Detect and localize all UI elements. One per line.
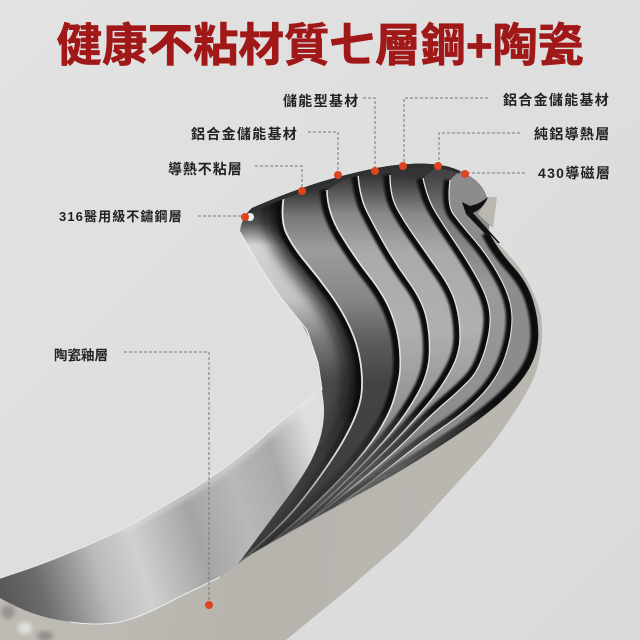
shadow before outer shell xyxy=(253,232,538,553)
shadow before layer 5 xyxy=(265,175,460,552)
callout: 316 stainless steel layer xyxy=(59,209,254,224)
layer band 6 xyxy=(308,168,506,522)
soft shading before first rim xyxy=(258,193,357,526)
callout: 316 stainless steel layer: 316醫用級不鏽鋼層 xyxy=(59,209,183,224)
highlight along the rim xyxy=(70,577,220,624)
callout: conductive non-stick layer: 導熱不粘層 xyxy=(168,161,242,177)
reflections at the lower left xyxy=(1,605,53,640)
shadow before layer 7 xyxy=(285,180,512,540)
dark seam along the shell xyxy=(253,232,538,553)
callout: aluminium alloy base left xyxy=(191,126,342,179)
callout: ceramic glaze layer xyxy=(54,347,213,609)
dark lip along the top of the cut xyxy=(245,165,460,213)
callout: energy storage base xyxy=(283,93,379,175)
callout: energy storage base: 儲能型基材 xyxy=(283,93,360,109)
layer band 4 xyxy=(286,164,473,534)
callout: conductive non-stick layer xyxy=(168,161,306,195)
cross-section of seven steel and ceramic layers xyxy=(238,164,537,564)
outer ceramic-coated body xyxy=(0,232,542,640)
layer band 3 xyxy=(268,164,473,544)
title: 健康不粘材質七層鋼+陶瓷 xyxy=(56,20,584,71)
layer band 2 xyxy=(240,164,486,562)
lip end notch and tip xyxy=(462,197,500,243)
callout: aluminium alloy base right xyxy=(399,92,610,170)
layer band 7 xyxy=(334,171,530,508)
callout: pure aluminium layer xyxy=(434,126,610,170)
shadow before layer 3 xyxy=(250,190,400,560)
inner ceramic bowl surface xyxy=(0,388,325,625)
shadow before layer 2 xyxy=(240,195,362,562)
shadow before layer 6 xyxy=(272,178,490,548)
pale edge along the left of the cut xyxy=(240,232,322,390)
callout: aluminium alloy base left: 鋁合金儲能基材 xyxy=(191,126,298,142)
shadow before layer 4 xyxy=(274,176,429,540)
callout: aluminium alloy base right: 鋁合金儲能基材 xyxy=(503,92,610,108)
callout: ceramic glaze layer: 陶瓷釉層 xyxy=(54,347,108,363)
callout: 430 magnetic layer: 430導磁層 xyxy=(538,165,611,181)
layer band 5 xyxy=(306,164,473,523)
callout: pure aluminium layer: 純鋁導熱層 xyxy=(534,126,610,142)
callout: 430 magnetic layer xyxy=(461,165,611,181)
layer: ceramic glaze inner face xyxy=(238,164,487,564)
